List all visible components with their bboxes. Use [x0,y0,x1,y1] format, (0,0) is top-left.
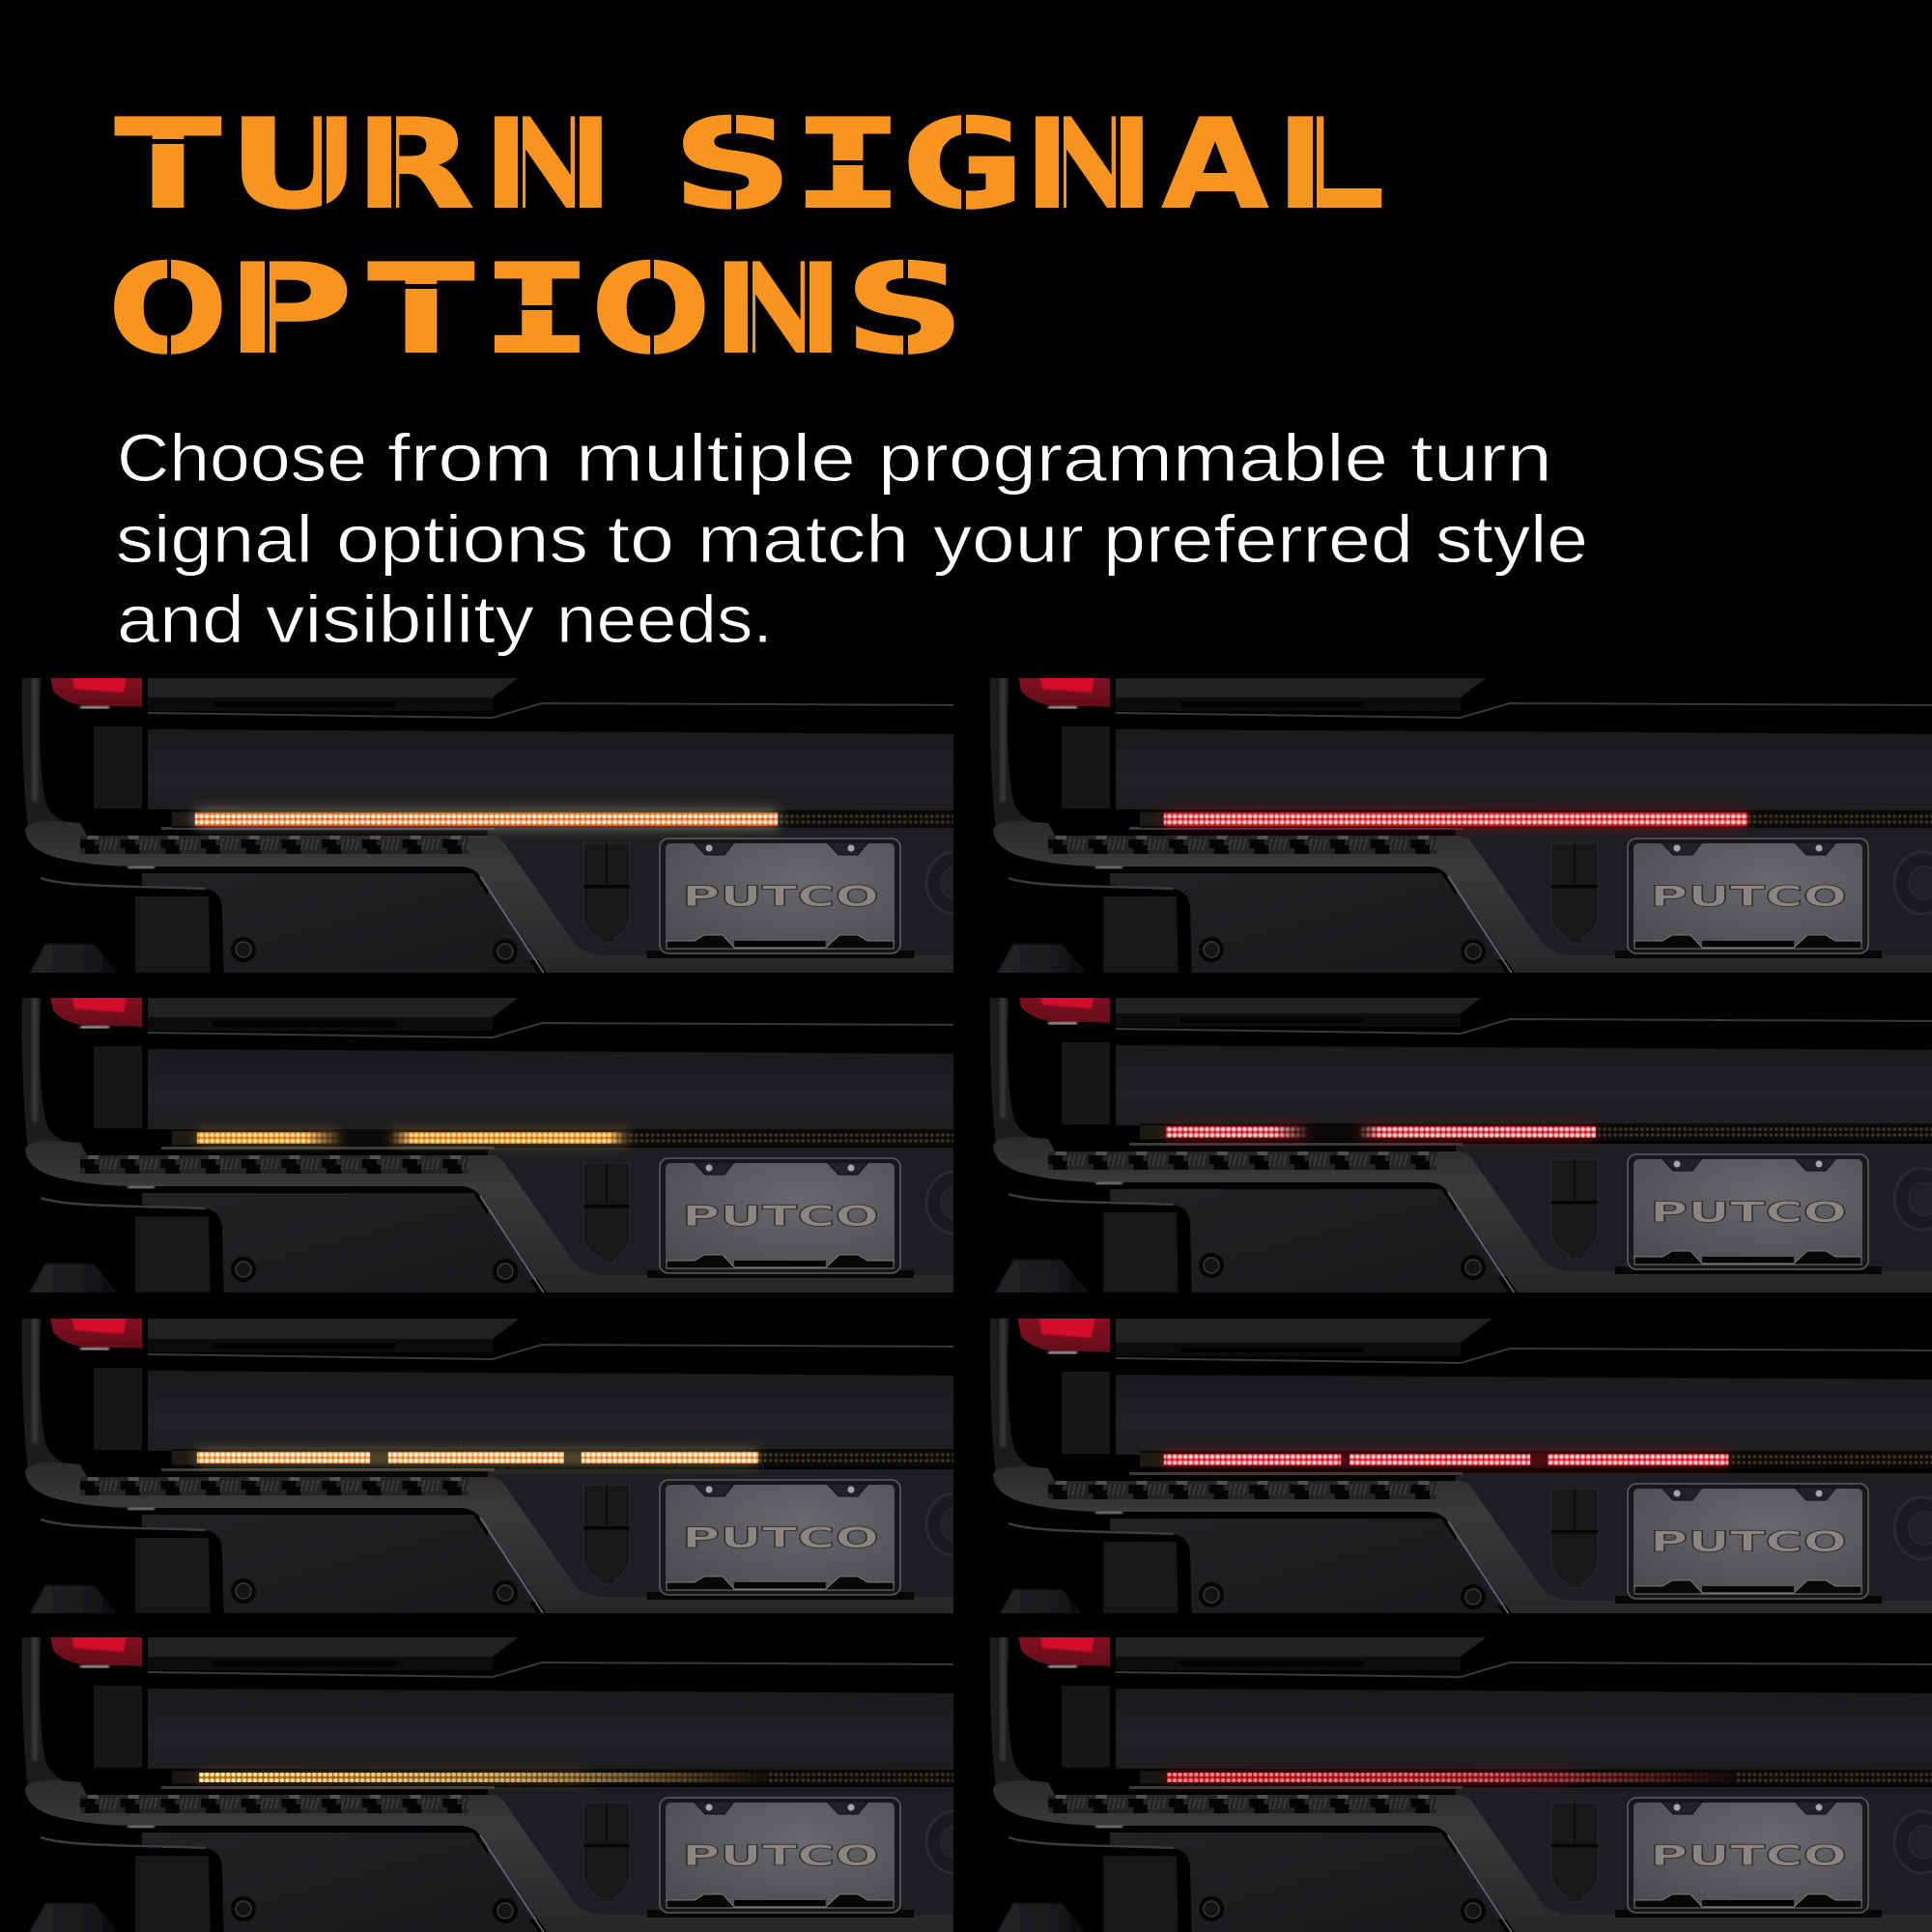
panel: red fading sweep [968,1626,1932,1932]
intro paragraph: Choose [117,420,367,496]
title line 2: I [480,238,593,381]
light bar: red fade [1140,1770,1932,1785]
license plate logo: PUTCO [682,1839,879,1872]
intro paragraph: options [336,501,588,577]
truck tailgate [21,678,953,973]
title line 1: G [902,93,1024,236]
panel: amber sequential full sweep [21,678,953,973]
license plate logo: PUTCO [1650,1525,1847,1558]
light bar: two red segments [1140,1123,1932,1141]
intro paragraph: and [117,582,244,657]
light bar: three amber segments [172,1449,978,1466]
panel: red sequential full sweep [968,667,1932,985]
title line 1: R [355,93,474,236]
light bar: full amber [172,810,978,828]
intro paragraph: from [387,420,553,496]
title line 1: N [481,93,614,236]
intro paragraph: turn [1410,420,1552,496]
title line 1: I [791,93,904,236]
truck tailgate [21,998,953,1293]
truck tailgate [21,1319,953,1613]
intro paragraph: style [1435,501,1588,577]
license plate logo: PUTCO [1650,1839,1847,1872]
intro paragraph: your [933,501,1084,577]
intro paragraph: programmable [878,420,1388,496]
title line 1: L [1273,93,1385,236]
license plate logo: PUTCO [1650,880,1847,913]
title line 1: A [1162,93,1268,236]
title line 1: U [228,93,360,236]
license plate logo: PUTCO [682,1521,879,1554]
intro paragraph: needs. [556,582,773,657]
title line 2: T [368,238,474,381]
title line 2 [108,238,964,381]
light bar: full red [1140,810,1932,828]
intro paragraph [116,420,1588,657]
license plate logo: PUTCO [1650,1196,1847,1229]
truck tailgate [968,1626,1932,1932]
panel: amber fading sweep [0,1626,982,1932]
truck tailgate [968,667,1932,985]
light bar: two amber segments [172,1129,978,1147]
truck tailgate [968,982,1932,1301]
panel: amber three-segment chase [21,1319,953,1613]
title line 2: S [844,238,964,381]
truck tailgate [968,1312,1932,1631]
title line 2: O [591,238,711,381]
license plate logo: PUTCO [682,1200,879,1233]
intro paragraph: visibility [266,582,534,657]
title stencil cuts [153,114,1317,355]
intro paragraph: signal [116,501,313,577]
title line 2: O [108,238,228,381]
title line 2: N [711,238,844,381]
license plate logo: PUTCO [682,880,879,913]
title line 1: N [1022,93,1155,236]
intro paragraph: preferred [1103,501,1413,577]
panel: red two-segment chase [968,982,1932,1301]
intro paragraph: to [608,501,674,577]
intro paragraph: multiple [576,420,856,496]
title line 1: S [672,93,792,236]
title line 1 [114,93,1385,236]
light bar: three red segments [1140,1451,1932,1468]
panel: amber two-segment chase [21,998,953,1293]
title line 2: P [226,238,354,381]
intro paragraph: match [697,501,909,577]
light bar: amber fade [172,1770,978,1785]
panel: red three-segment chase [968,1312,1932,1631]
truck tailgate [0,1626,982,1932]
title line 1: T [115,93,221,236]
